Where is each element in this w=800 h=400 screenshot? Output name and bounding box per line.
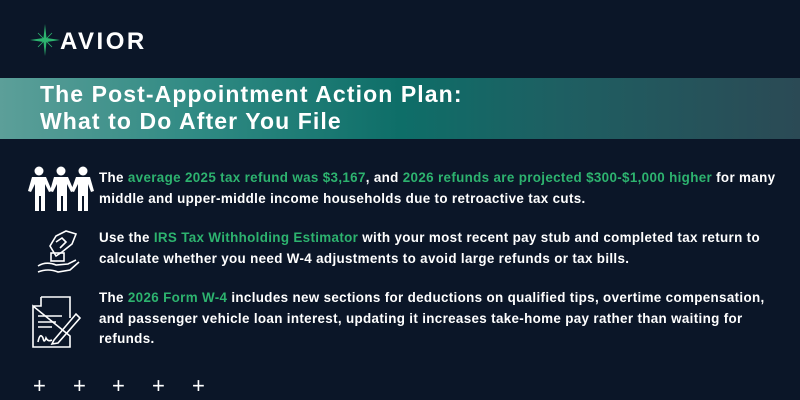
banner (0, 78, 800, 139)
decorative plus row: + (152, 373, 165, 398)
text: estimator: calculate whether you need W-4 adjustments to avoid large refunds or tax bills. (99, 250, 629, 266)
icon: people (28, 166, 94, 211)
icon: hand vote (38, 230, 80, 273)
decorative plus row: + (192, 373, 205, 398)
text: W-4: refunds. (99, 331, 155, 346)
title: The Post-Appointment Action Plan: (40, 81, 463, 107)
decorative plus row (33, 373, 205, 398)
text: refund: middle and upper-middle income households due to retroactive tax cuts. (99, 190, 586, 206)
text: W-4: The 2026 Form W-4 includes new sections for deductions on qualified tips, overtime compensation, (99, 290, 765, 305)
text: W-4 (99, 290, 765, 346)
text: W-4: and passenger vehicle loan interest, updating it increases take-home pay rather than waiting for (99, 310, 743, 326)
logo (30, 24, 147, 56)
icon: signed document (32, 296, 81, 348)
decorative plus row: + (73, 373, 86, 398)
text: refund (99, 170, 775, 206)
decorative plus row: + (112, 373, 125, 398)
title: What to Do After You File (40, 108, 342, 134)
decorative plus row: + (33, 373, 46, 398)
logo: AVIOR (60, 28, 147, 55)
title (40, 81, 463, 134)
text: refund: The average 2025 tax refund was $3,167, and 2026 refunds are projected $300-$1,000 higher for many (99, 170, 775, 185)
text: estimator: Use the IRS Tax Withholding Estimator with your most recent pay stub and completed tax return to (99, 230, 760, 245)
text: estimator (99, 230, 760, 266)
